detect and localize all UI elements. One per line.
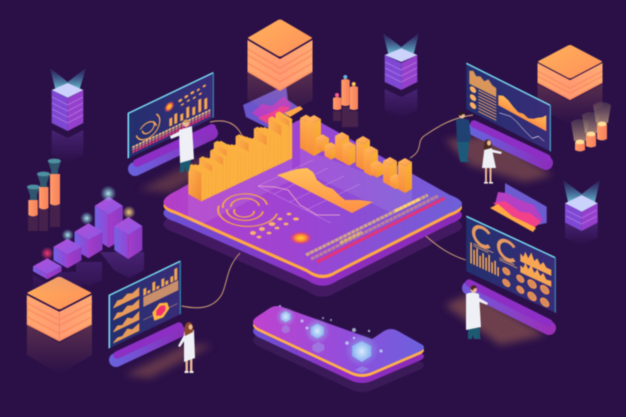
person: man in suit (456, 111, 471, 162)
connector wires (182, 115, 473, 308)
server stack: lower left (27, 277, 92, 374)
server stack: top right (538, 45, 602, 124)
lamp caps (27, 159, 61, 200)
purple server with beam: left (50, 68, 86, 163)
monitor: top left (128, 73, 213, 169)
screen (109, 261, 180, 348)
person: woman in white dress (482, 139, 502, 184)
monitor base (469, 283, 549, 328)
monitor base (474, 124, 547, 163)
monitor base (116, 326, 179, 360)
purple server with beam: top center (383, 33, 419, 118)
floating wave chart: top (243, 85, 303, 128)
person: scientist lower right (466, 285, 488, 339)
area chart (277, 168, 373, 213)
heatmap strip (306, 195, 445, 262)
platform side (163, 130, 462, 286)
purple server with beam: right (563, 180, 600, 246)
purple block chart (33, 186, 144, 296)
floor light under monitors (125, 135, 552, 378)
platform top surface (163, 118, 462, 275)
monitor: lower right (466, 216, 555, 328)
orange isometric box bars (300, 115, 412, 193)
screen (466, 216, 555, 313)
hexagon nodes (276, 305, 383, 373)
sun marker (290, 232, 312, 244)
platform reflection (163, 140, 462, 297)
person: scientist top left (170, 119, 194, 173)
screen (466, 63, 550, 151)
orange fin bar chart (188, 111, 292, 202)
coil gauge (218, 194, 277, 226)
cylinders: top center (333, 75, 358, 127)
screen (128, 73, 213, 158)
cylinders: left (27, 159, 61, 231)
main platform (163, 118, 462, 286)
small dots cluster (250, 213, 299, 238)
server stack: top center (248, 20, 312, 118)
chart grid (258, 160, 360, 223)
lower L-shaped platform (253, 305, 424, 392)
monitor: top right (466, 63, 550, 163)
person: woman lower left (178, 322, 195, 373)
floating wave chart: right (490, 183, 547, 232)
monitor: lower left (109, 261, 180, 360)
glow dots (41, 186, 135, 260)
platform orange edge (163, 122, 462, 278)
line chart (258, 186, 340, 215)
monitor base (135, 128, 212, 169)
glowing cylinders: right (571, 102, 611, 152)
bar reflections on surface (188, 148, 412, 225)
